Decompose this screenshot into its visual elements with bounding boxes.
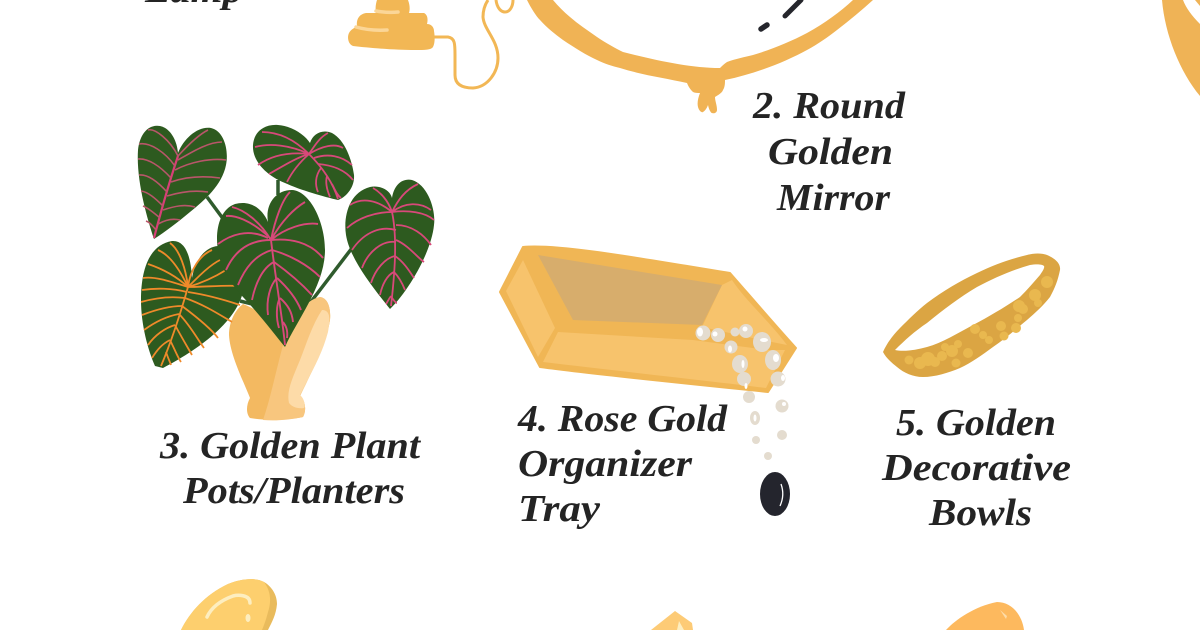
- label: golden decorative bowls: Bowls: [928, 492, 1032, 534]
- leaf: right: [345, 180, 434, 309]
- leaf: orange veined: [141, 241, 243, 368]
- golden pot: [229, 297, 330, 420]
- icon: bottom right golden item: [946, 602, 1024, 630]
- icon: round golden mirror: [527, 0, 873, 113]
- black bead: [760, 472, 790, 516]
- label: round golden mirror: [752, 85, 906, 219]
- label: round golden mirror: 2. Round: [752, 85, 906, 127]
- icon: rose gold organizer tray with pearls: [500, 246, 796, 516]
- label: golden plant pots: 3. Golden Plant: [159, 425, 422, 467]
- label: golden plant pots: Pots/Planters: [182, 470, 405, 512]
- icon: golden decorative bowl: [883, 254, 1060, 377]
- tray body: [500, 246, 796, 392]
- stems: [207, 180, 352, 305]
- leaf: top middle: [253, 125, 354, 200]
- label: rose gold organizer tray: [517, 398, 728, 530]
- icon: bottom left golden item: [181, 579, 277, 630]
- pearls: [696, 324, 788, 460]
- label: golden plant pots: [159, 425, 422, 512]
- icon: bottom center golden item: [651, 611, 693, 630]
- icon: lamp base and cord: [348, 0, 513, 88]
- icon: potted plant: [138, 125, 434, 420]
- label: round golden mirror: Golden: [768, 131, 893, 173]
- icon: right edge ring: [1162, 0, 1200, 96]
- label: golden decorative bowls: [881, 402, 1071, 534]
- label: rose gold organizer tray: Organizer: [518, 443, 693, 485]
- label: rose gold organizer tray: Tray: [518, 488, 600, 530]
- label: round golden mirror: Mirror: [776, 177, 891, 219]
- label: golden decorative bowls: Decorative: [881, 447, 1071, 489]
- label: golden decorative bowls: 5. Golden: [896, 402, 1056, 444]
- leaf: top left: [138, 126, 227, 239]
- label: rose gold organizer tray: 4. Rose Gold: [517, 398, 728, 440]
- leaf: center: [217, 190, 325, 347]
